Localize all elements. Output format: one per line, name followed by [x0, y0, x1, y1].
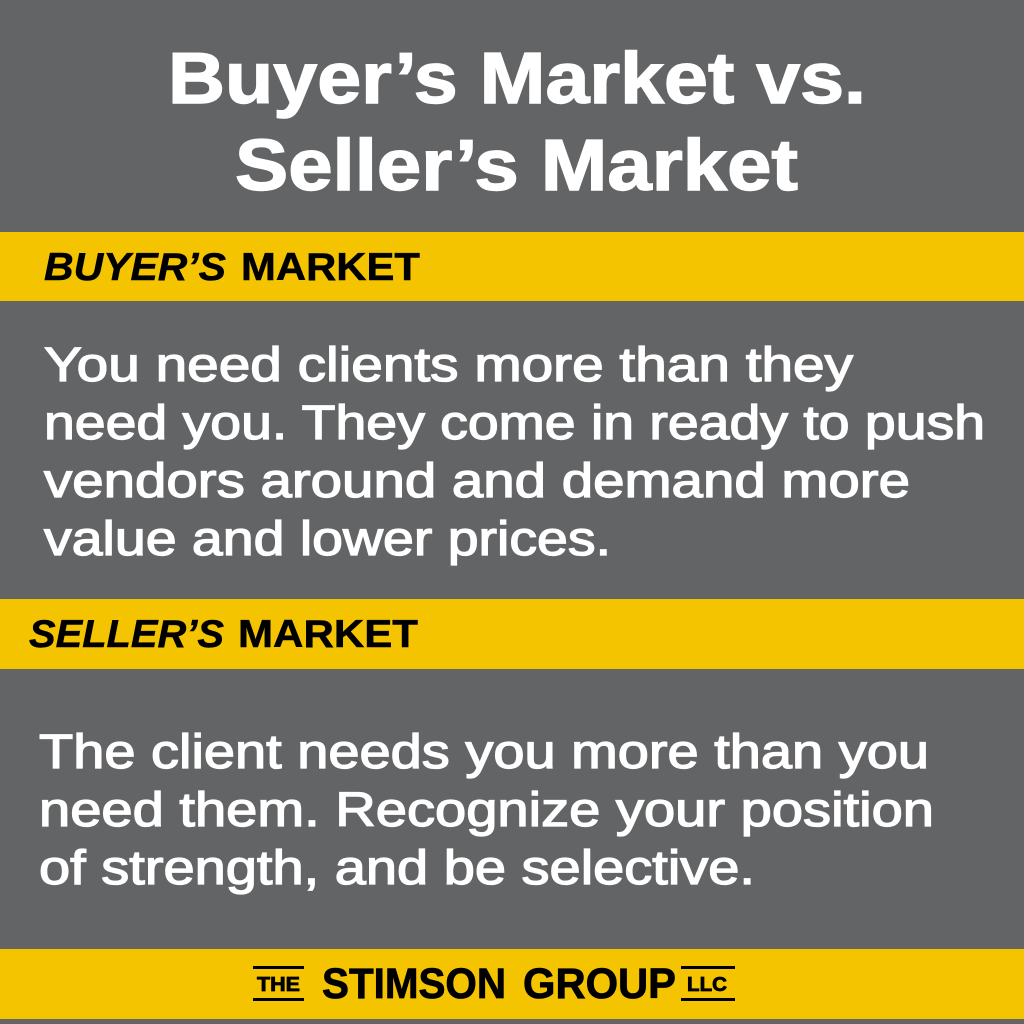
panel: seller's market heading: SELLER’S: [29, 613, 224, 656]
text block: buyer's market description: vendors around and demand more: [44, 455, 910, 508]
title: [168, 39, 866, 206]
logo: The Stimson Group LLC: STIMSON: [322, 960, 506, 1008]
panel: seller's market heading: [0, 599, 1024, 669]
text block: seller's market description: [39, 726, 934, 895]
panel: buyer's market heading: BUYER’S: [44, 246, 226, 289]
panel: buyer's market heading: MARKET: [241, 246, 420, 289]
text block: buyer's market description: need you. They come in ready to push: [44, 397, 985, 450]
logo: The Stimson Group LLC: LLC: [687, 974, 727, 996]
title: Buyer’s Market vs.: [168, 39, 866, 119]
title: Seller’s Market: [235, 126, 798, 206]
text block: buyer's market description: You need clients more than they: [44, 339, 853, 392]
logo: The Stimson Group LLC: GROUP: [523, 960, 676, 1008]
panel: seller's market heading: MARKET: [238, 613, 418, 656]
text block: buyer's market description: value and lower prices.: [44, 513, 611, 566]
text block: seller's market description: of strength, and be selective.: [39, 842, 755, 895]
footer band: [0, 949, 1024, 1019]
logo: The Stimson Group LLC: THE: [257, 974, 300, 996]
text block: buyer's market description: [44, 339, 985, 566]
text block: seller's market description: need them. Recognize your position: [39, 784, 934, 837]
text block: seller's market description: The client needs you more than you: [39, 726, 929, 779]
panel: buyer's market heading: [0, 232, 1024, 301]
logo: The Stimson Group LLC: [253, 960, 735, 1008]
